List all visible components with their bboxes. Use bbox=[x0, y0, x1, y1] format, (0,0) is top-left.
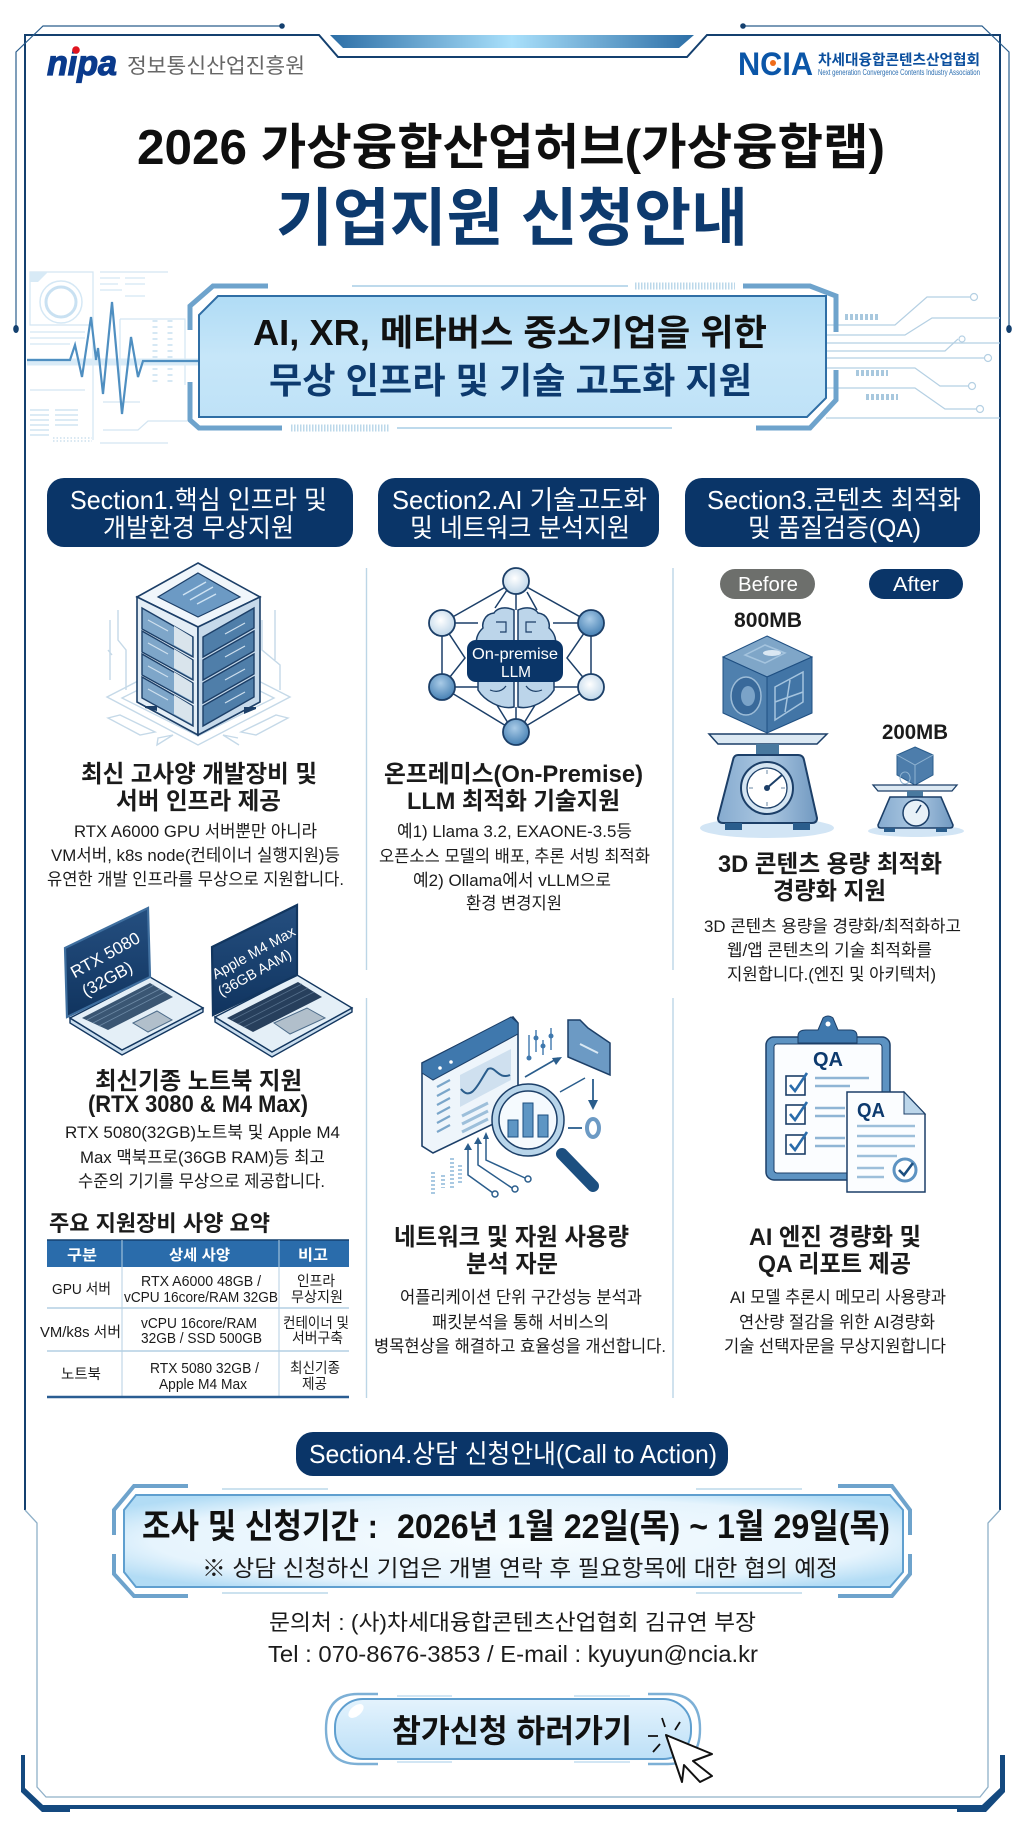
icon: cursor bbox=[666, 1735, 712, 1782]
section 2 heading pill bbox=[378, 478, 659, 547]
logo: nipa: 정보통신산업진흥원 bbox=[127, 55, 305, 78]
period text bbox=[142, 1508, 890, 1581]
text block: 고사양 장비 bbox=[47, 761, 344, 889]
icon: QA clipboard: QA bbox=[857, 1100, 885, 1122]
logo: nipa: nipa bbox=[47, 44, 117, 83]
banner decoration: left pulse bbox=[27, 272, 200, 443]
table heading: 주요 지원장비 사양 요약 bbox=[49, 1211, 270, 1236]
banner panel bbox=[190, 286, 836, 428]
before and after labels bbox=[720, 569, 963, 744]
text block: 3D 콘텐츠: 지원합니다.(엔진 및 아키텍처) bbox=[727, 965, 936, 984]
table: 주요 지원장비 사양 요약: vCPU 16core/RAM 32GB bbox=[124, 1290, 278, 1306]
section 1 heading pill: Section1.핵심 인프라 및 bbox=[70, 485, 327, 515]
icon: laptop RTX 5080: RTX 5080 bbox=[67, 928, 143, 982]
contact information bbox=[268, 1610, 758, 1667]
text block: 노트북: 수준의 기기를 무상으로 제공합니다. bbox=[78, 1172, 325, 1191]
text block: 노트북: Max 맥북프로(36GB RAM)등 최고 bbox=[80, 1148, 325, 1167]
section 4 heading pill: Section4.상담 신청안내(Call to Action) bbox=[309, 1439, 717, 1469]
text block: 고사양 장비: VM서버, k8s node(컨테이너 실행지원)등 bbox=[51, 846, 340, 865]
before and after labels: 200MB bbox=[882, 721, 948, 744]
icon: on-premise LLM network: On-premise bbox=[472, 646, 558, 663]
text block: 네트워크 자문 bbox=[374, 1224, 666, 1356]
table: 주요 지원장비 사양 요약: GPU 서버 bbox=[52, 1281, 111, 1298]
text block: 3D 콘텐츠: 경량화 지원 bbox=[773, 878, 886, 905]
section 1 heading pill bbox=[47, 478, 353, 547]
icon: on-premise LLM network: LLM bbox=[501, 664, 531, 681]
section 1 heading pill: 개발환경 무상지원 bbox=[103, 513, 294, 543]
banner text: 무상 인프라 및 기술 고도화 지원 bbox=[269, 360, 752, 401]
text block: AI 엔진: AI 모델 추론시 메모리 사용량과 bbox=[730, 1288, 946, 1307]
logo: NCIA: NCIA bbox=[738, 46, 813, 82]
logo: NCIA: 차세대융합콘텐츠산업협회 bbox=[818, 52, 980, 69]
table: 주요 지원장비 사양 요약: 무상지원 bbox=[291, 1289, 343, 1306]
icon: QA clipboard: QA bbox=[813, 1049, 843, 1071]
text block: 고사양 장비: 서버 인프라 제공 bbox=[116, 788, 281, 815]
section 4 heading pill bbox=[296, 1432, 728, 1476]
logo: NCIA bbox=[738, 46, 980, 82]
table: 주요 지원장비 사양 요약: 노트북 bbox=[61, 1367, 101, 1383]
title: 2026 가상융합산업허브(가상융합랩) bbox=[137, 121, 885, 175]
before and after labels: Before bbox=[738, 574, 798, 596]
banner decoration: right circuit bbox=[826, 294, 1000, 418]
text block: 온프레미스: 오픈소스 모델의 배포, 추론 서빙 최적화 bbox=[379, 847, 650, 866]
text block: AI 엔진: 연산량 절감을 위한 AI경량화 bbox=[739, 1313, 935, 1332]
icon: QA clipboard bbox=[766, 1016, 925, 1192]
table: 주요 지원장비 사양 요약: Apple M4 Max bbox=[159, 1377, 248, 1393]
title bbox=[137, 121, 885, 254]
text block: AI 엔진: QA 리포트 제공 bbox=[758, 1251, 911, 1278]
icon: laptop Apple M4 Max: (36GB AAM) bbox=[216, 947, 295, 1000]
icon: laptop RTX 5080 bbox=[65, 908, 203, 1055]
table: 주요 지원장비 사양 요약: 비고 bbox=[298, 1247, 328, 1264]
button: apply bbox=[326, 1694, 712, 1782]
text block: 3D 콘텐츠: 3D 콘텐츠 용량 최적화 bbox=[718, 851, 942, 878]
title: 기업지원 신청안내 bbox=[276, 184, 748, 254]
table: 주요 지원장비 사양 요약: 상세 사양 bbox=[169, 1247, 230, 1264]
text block: 온프레미스: 예1) Llama 3.2, EXAONE-3.5등 bbox=[397, 822, 632, 841]
icon: laptop RTX 5080: (32GB) bbox=[79, 958, 136, 1001]
banner text bbox=[253, 312, 767, 401]
icon: large cube on scale bbox=[700, 636, 834, 838]
icon: laptop Apple M4 Max bbox=[210, 905, 352, 1057]
table: 주요 지원장비 사양 요약: 제공 bbox=[302, 1376, 327, 1393]
banner text: AI, XR, 메타버스 중소기업을 위한 bbox=[253, 312, 767, 353]
table: 주요 지원장비 사양 요약: RTX A6000 48GB / bbox=[141, 1274, 262, 1290]
text block: AI 엔진: AI 엔진 경량화 및 bbox=[749, 1224, 921, 1251]
table: 주요 지원장비 사양 요약: 최신기종 bbox=[290, 1360, 340, 1377]
table: 주요 지원장비 사양 요약: 인프라 bbox=[297, 1273, 335, 1290]
before and after labels: After bbox=[893, 574, 939, 596]
icon: server rack bbox=[107, 563, 290, 745]
text block: 온프레미스: LLM 최적화 기술지원 bbox=[407, 788, 620, 815]
text block: 네트워크 자문: 어플리케이션 단위 구간성능 분석과 bbox=[400, 1288, 642, 1307]
text block: 3D 콘텐츠: 웹/앱 콘텐츠의 기술 최적화를 bbox=[727, 941, 932, 960]
column dividers bbox=[366, 568, 673, 1398]
logo: nipa bbox=[47, 44, 305, 83]
table: 주요 지원장비 사양 요약: VM/k8s 서버 bbox=[40, 1324, 121, 1341]
period text: 조사 및 신청기간 : bbox=[142, 1508, 378, 1546]
table: 주요 지원장비 사양 요약: 서버구축 bbox=[292, 1330, 343, 1347]
text block: 노트북: (RTX 3080 & M4 Max) bbox=[88, 1091, 308, 1118]
text block: 네트워크 자문: 네트워크 및 자원 사용량 bbox=[394, 1224, 629, 1251]
section 2 heading pill: Section2.AI 기술고도화 bbox=[392, 485, 647, 515]
text block: 네트워크 자문: 분석 자문 bbox=[466, 1251, 558, 1278]
period text: ※ 상담 신청하신 기업은 개별 연락 후 필요항목에 대한 협의 예정 bbox=[202, 1555, 838, 1581]
panel: application period bbox=[114, 1486, 910, 1596]
text block: 온프레미스 bbox=[379, 761, 650, 913]
text block: 온프레미스: 예2) Ollama에서 vLLM으로 bbox=[413, 871, 611, 890]
text block: 3D 콘텐츠 bbox=[704, 851, 961, 984]
table: 주요 지원장비 사양 요약: 구분 bbox=[67, 1247, 97, 1264]
text block: 노트북: 최신기종 노트북 지원 bbox=[95, 1068, 302, 1095]
contact information: 문의처 : (사)차세대융합콘텐츠산업협회 김규연 부장 bbox=[269, 1610, 756, 1635]
section 3 heading pill bbox=[685, 478, 980, 547]
table: 주요 지원장비 사양 요약 bbox=[40, 1211, 349, 1397]
text block: 고사양 장비: RTX A6000 GPU 서버뿐만 아니라 bbox=[74, 822, 317, 841]
section 3 heading pill: Section3.콘텐츠 최적화 bbox=[707, 485, 961, 515]
section 2 heading pill: 및 네트워크 분석지원 bbox=[410, 513, 630, 543]
section 3 heading pill: 및 품질검증(QA) bbox=[748, 513, 921, 543]
text block: 네트워크 자문: 패킷분석을 통해 서비스의 bbox=[432, 1313, 609, 1332]
icon: laptop Apple M4 Max: Apple M4 Max bbox=[210, 924, 299, 983]
table: 주요 지원장비 사양 요약: 32GB / SSD 500GB bbox=[141, 1331, 262, 1347]
button: apply: 참가신청 하러가기 bbox=[392, 1713, 632, 1749]
contact information: Tel : 070-8676-3853 / E-mail : kyuyun@ncia.kr bbox=[268, 1641, 758, 1667]
text block: AI 엔진: 기술 선택자문을 무상지원합니다 bbox=[724, 1337, 946, 1356]
text block: 노트북 bbox=[65, 1068, 340, 1191]
table: 주요 지원장비 사양 요약: 컨테이너 및 bbox=[283, 1315, 349, 1332]
before and after labels: 800MB bbox=[734, 609, 802, 632]
text block: 온프레미스: 환경 변경지원 bbox=[466, 894, 562, 913]
icon: analytics window with magnifier bbox=[422, 1017, 610, 1197]
period text: 2026년 1월 22일(목) ~ 1월 29일(목) bbox=[397, 1508, 890, 1546]
text block: 3D 콘텐츠: 3D 콘텐츠 용량을 경량화/최적화하고 bbox=[704, 917, 961, 936]
text block: 고사양 장비: 유연한 개발 인프라를 무상으로 지원합니다. bbox=[47, 870, 344, 889]
table: 주요 지원장비 사양 요약: vCPU 16core/RAM bbox=[141, 1316, 257, 1332]
table: 주요 지원장비 사양 요약: RTX 5080 32GB / bbox=[150, 1361, 260, 1377]
text block: AI 엔진 bbox=[724, 1224, 946, 1356]
text block: 온프레미스: 온프레미스(On-Premise) bbox=[384, 761, 643, 788]
text block: 네트워크 자문: 병목현상을 해결하고 효율성을 개선합니다. bbox=[374, 1337, 666, 1356]
icon: small cube on scale bbox=[868, 747, 964, 837]
text block: 노트북: RTX 5080(32GB)노트북 및 Apple M4 bbox=[65, 1123, 340, 1142]
icon: on-premise LLM network bbox=[429, 568, 604, 745]
text block: 고사양 장비: 최신 고사양 개발장비 및 bbox=[81, 761, 317, 788]
